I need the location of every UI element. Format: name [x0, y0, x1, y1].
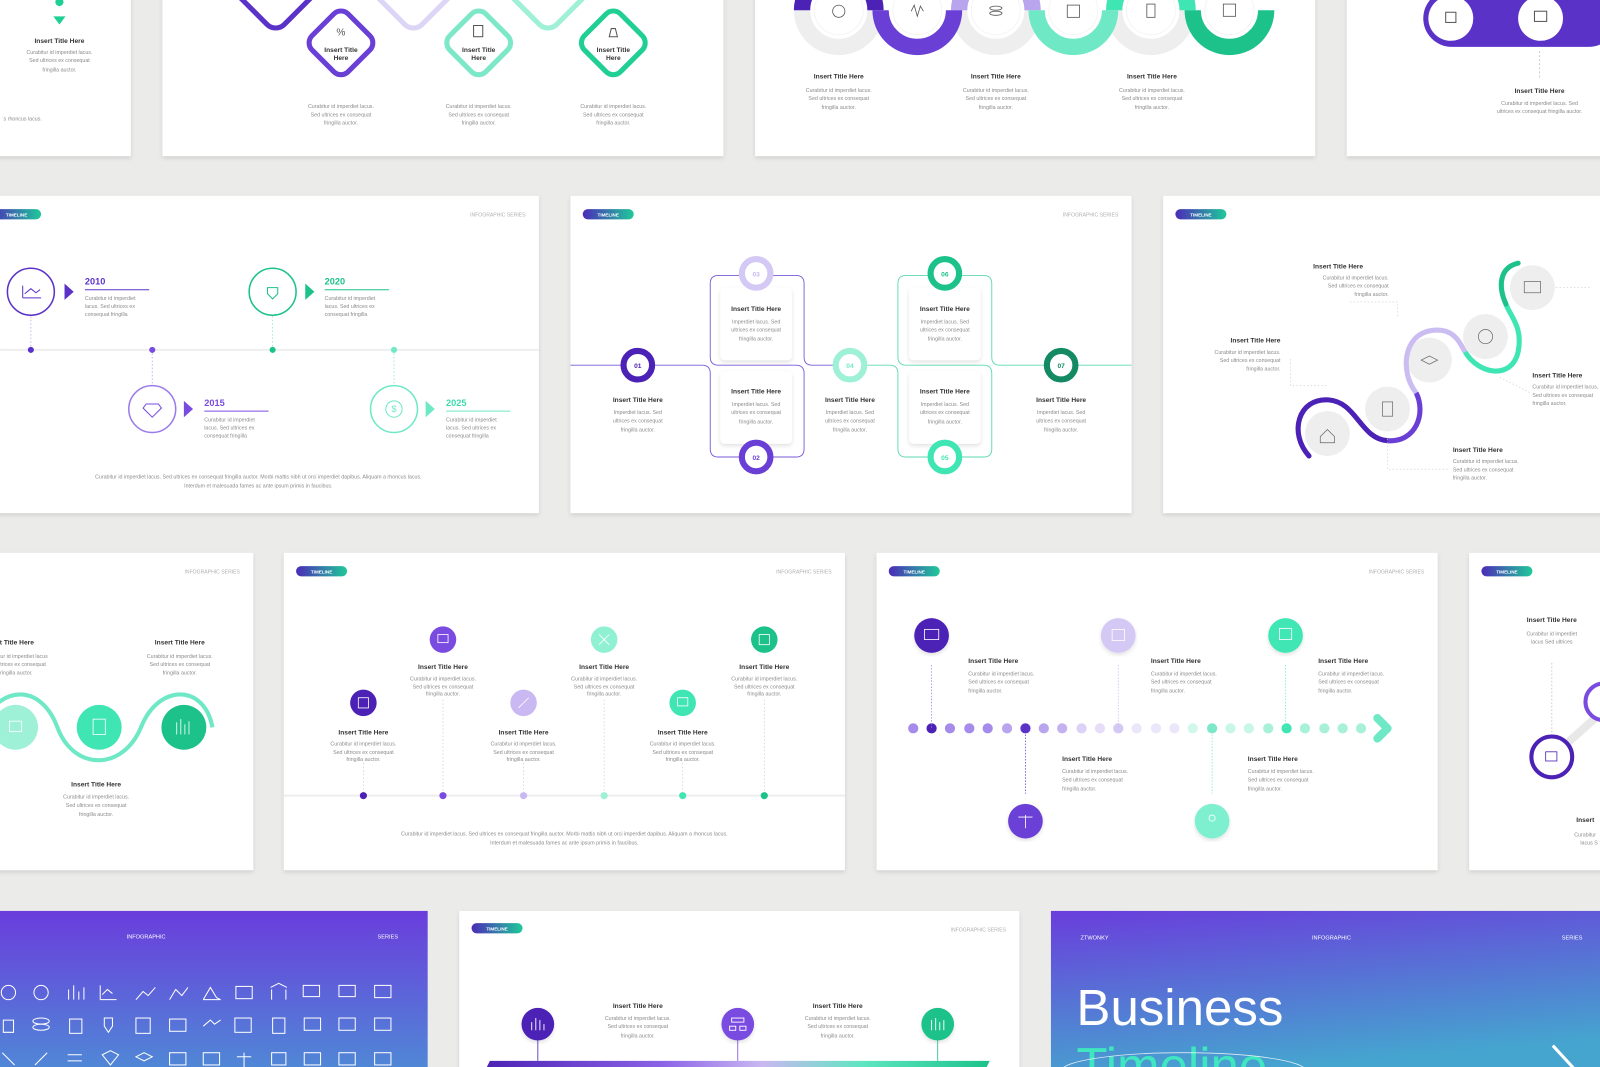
- slide: s-curve: fringilla auctor.: [1246, 366, 1280, 372]
- slide: icon set gradient: SERIES: [378, 934, 398, 940]
- slide: numbered process: fringilla auctor.: [833, 427, 867, 433]
- slide: wave circles: Curabitur id imperdiet lacus.: [63, 795, 129, 801]
- slide: dotted arrow timeline: Insert Title Here: [1062, 756, 1112, 763]
- slide: stepped icons timeline: [284, 553, 845, 870]
- slide: top-left partial: Curabitur id imperdiet lacus.: [26, 50, 92, 56]
- slide: numbered process: fringilla auctor.: [621, 427, 655, 433]
- slide: s-curve: Insert Title Here: [1313, 263, 1363, 270]
- slide: top-right partial: [1347, 0, 1600, 156]
- slide: icon set gradient: [0, 911, 428, 1067]
- slide: dotted arrow timeline: Insert Title Here: [968, 658, 1019, 665]
- slide: dotted arrow timeline: TIMELINE: [904, 569, 925, 574]
- slide: right partial vertical: Insert Title Here: [1527, 617, 1577, 624]
- slide: numbered process: 02: [752, 455, 760, 462]
- slide: cover Business Timeline: INFOGRAPHIC: [1312, 935, 1351, 941]
- slide: diamonds: Here: [334, 55, 349, 62]
- slide: right partial vertical: [1469, 553, 1600, 870]
- slide: diamonds: Curabitur id imperdiet lacus.: [446, 104, 512, 110]
- slide: dotted arrow timeline: Sed ultrices ex consequat: [968, 679, 1029, 685]
- slide: ring chain: Curabitur id imperdiet lacus.: [1119, 88, 1185, 94]
- slide: years timeline: Curabitur id imperdiet: [446, 417, 497, 423]
- slide: numbered process: Insert Title Here: [920, 306, 970, 313]
- slide: ring chain: fringilla auctor.: [979, 105, 1013, 111]
- slide: years timeline: 2010: [85, 277, 105, 287]
- slide: diamonds: Sed ultrices ex consequat: [583, 112, 644, 118]
- slide: years timeline: lacus. Sed ultrices ex: [204, 425, 255, 431]
- slide: stepped icons timeline: Insert Title Here: [418, 664, 468, 671]
- slide: dotted arrow timeline: Curabitur id imperdiet lacus.: [1151, 671, 1217, 677]
- slide: numbered process: TIMELINE: [598, 212, 619, 217]
- slide: numbered process: Imperdiet lacus. Sed: [826, 410, 874, 416]
- slide: stepped icons timeline: Sed ultrices ex consequat: [413, 685, 474, 691]
- slide: stepped icons timeline: INFOGRAPHIC SERIES: [776, 569, 832, 575]
- slide: right partial vertical: lacus Sed ultrices: [1531, 640, 1573, 646]
- slide: top-left partial: Insert Title Here: [34, 38, 85, 45]
- slide: numbered process: 04: [846, 363, 854, 370]
- slide: numbered process: [570, 196, 1132, 513]
- slide: top-right partial: ultrices ex consequat fringilla auctor.: [1497, 109, 1582, 115]
- slide: years timeline: TIMELINE: [6, 212, 27, 217]
- slide: stepped icons timeline: Insert Title Here: [338, 729, 389, 736]
- slide: diamonds: [162, 0, 723, 156]
- slide: dotted arrow timeline: Sed ultrices ex consequat: [1318, 679, 1379, 685]
- slide: numbered process: Insert Title Here: [731, 306, 781, 313]
- slide: diamonds: Insert Title: [462, 47, 496, 54]
- slide: diamonds: %: [336, 28, 345, 39]
- slide: cover Business Timeline: [1051, 911, 1600, 1067]
- slide: right partial vertical: Curabitur id imperdiet: [1526, 632, 1578, 638]
- slide: stepped icons timeline: Curabitur id imperdiet lacus.: [731, 676, 797, 682]
- slide: chevron band timeline: Curabitur id imperdiet lacus.: [605, 1016, 671, 1022]
- slide: cover Business Timeline: ZTWONKY: [1081, 935, 1109, 941]
- slide: chevron band timeline: [459, 911, 1019, 1067]
- slide: numbered process: 07: [1057, 363, 1065, 370]
- slide: numbered process: Insert Title Here: [613, 397, 663, 404]
- slide: numbered process: ultrices ex consequat: [731, 410, 782, 416]
- slide: diamonds: fringilla auctor.: [462, 120, 496, 126]
- slide: numbered process: 06: [941, 271, 949, 278]
- slide: numbered process: fringilla auctor.: [739, 419, 773, 425]
- slide: right partial vertical: Insert: [1576, 817, 1595, 824]
- slide: numbered process: 03: [752, 271, 760, 278]
- slide: chevron band timeline: Sed ultrices ex consequat: [607, 1024, 669, 1030]
- slide: stepped icons timeline: Sed ultrices ex consequat: [574, 685, 635, 691]
- slide: stepped icons timeline: Sed ultrices ex consequat: [333, 750, 394, 756]
- slide: ring chain: Insert Title Here: [971, 74, 1021, 81]
- slide: wave circles: fringilla auctor.: [79, 812, 113, 818]
- slide: dotted arrow timeline: Insert Title Here: [1151, 658, 1201, 665]
- slide: ring chain: fringilla auctor.: [822, 105, 856, 111]
- slide: numbered process: Imperdiet lacus. Sed: [1037, 410, 1085, 416]
- slide: dotted arrow timeline: fringilla auctor.: [1151, 689, 1185, 695]
- slide: years timeline: INFOGRAPHIC SERIES: [470, 212, 526, 218]
- slide: ring chain: Curabitur id imperdiet lacus.: [963, 88, 1029, 94]
- slide: numbered process: Insert Title Here: [920, 389, 970, 396]
- slide: years timeline: Curabitur id imperdiet: [204, 417, 255, 423]
- slide: s-curve: fringilla auctor.: [1354, 292, 1389, 298]
- slide: dotted arrow timeline: fringilla auctor.: [1248, 787, 1282, 793]
- slide: years timeline: Curabitur id imperdiet lacus. Sed ultrices ex consequat fringilla auctor. Morbi mattis nibh ut orci imperdiet dapibus. Aliquam a rhoncus lacus.: [95, 474, 422, 480]
- slide: numbered process: ultrices ex consequat: [825, 418, 875, 424]
- slide: years timeline: 2020: [325, 277, 345, 287]
- slide: stepped icons timeline: Sed ultrices ex consequat: [734, 685, 795, 691]
- slide: wave circles: Insert Title Here: [155, 640, 205, 647]
- slide: numbered process: INFOGRAPHIC SERIES: [1063, 212, 1119, 218]
- slide: diamonds: Insert Title: [324, 47, 358, 54]
- slide: s-curve: Sed ultrices ex consequat: [1328, 284, 1389, 290]
- slide: s-curve: Curabitur id imperdiet lacus.: [1323, 276, 1389, 282]
- slide: top-right partial: Insert Title Here: [1515, 88, 1565, 95]
- slide: dotted arrow timeline: Sed ultrices ex consequat: [1151, 679, 1212, 685]
- slide: years timeline: 2025: [446, 398, 466, 408]
- slide: numbered process: ultrices ex consequat: [920, 328, 970, 334]
- slide: s-curve: Curabitur id imperdiet lacus.: [1453, 459, 1519, 465]
- slide: s-curve: Insert Title Here: [1532, 372, 1583, 379]
- slide: numbered process: 01: [634, 363, 642, 370]
- slide: dotted arrow timeline: Sed ultrices ex consequat: [1062, 777, 1123, 783]
- slide: chevron band timeline: fringilla auctor.: [621, 1033, 655, 1039]
- slide: stepped icons timeline: fringilla auctor.: [747, 692, 781, 698]
- slide: stepped icons timeline: Curabitur id imperdiet lacus.: [571, 676, 637, 682]
- slide: top-left partial: [0, 0, 131, 156]
- slide: years timeline: consequat fringilla: [325, 312, 367, 318]
- slide: stepped icons timeline: fringilla auctor.: [666, 757, 700, 763]
- slide: s-curve: Insert Title Here: [1453, 447, 1503, 454]
- slide: wave circles: Sed ultrices ex consequat: [66, 803, 127, 809]
- slide: stepped icons timeline: Insert Title Here: [658, 729, 708, 736]
- slide: stepped icons timeline: Curabitur id imperdiet lacus.: [650, 742, 716, 748]
- slide: years timeline: consequat fringilla: [204, 434, 247, 440]
- slide: s-curve: Sed ultrices ex consequat: [1220, 358, 1281, 364]
- slide: chevron band timeline: Curabitur id imperdiet lacus.: [805, 1016, 871, 1022]
- slide: numbered process: Imperdiet lacus. Sed: [921, 319, 969, 325]
- slide: years timeline: lacus. Sed ultrices ex: [325, 304, 375, 310]
- slide: chevron band timeline: fringilla auctor.: [821, 1033, 855, 1039]
- slide: wave circles: fringilla auctor.: [163, 670, 197, 676]
- slide: dotted arrow timeline: fringilla auctor.: [1318, 689, 1352, 695]
- slide: dotted arrow timeline: Sed ultrices ex consequat: [1248, 777, 1309, 783]
- slide: stepped icons timeline: TIMELINE: [311, 569, 332, 574]
- slide: numbered process: ultrices ex consequat: [920, 410, 970, 416]
- slide: wave circles: Insert Title Here: [71, 781, 121, 788]
- slide: dotted arrow timeline: [877, 553, 1438, 870]
- slide: wave circles: [0, 553, 253, 870]
- slide: chevron band timeline: INFOGRAPHIC SERIES: [951, 927, 1007, 933]
- slide: dotted arrow timeline: fringilla auctor.: [1062, 787, 1096, 793]
- slide: s-curve: fringilla auctor.: [1532, 401, 1567, 407]
- slide: numbered process: Imperdiet lacus. Sed: [732, 402, 780, 408]
- slide: stepped icons timeline: fringilla auctor.: [346, 757, 380, 763]
- slide: dotted arrow timeline: Curabitur id imperdiet lacus.: [968, 671, 1034, 677]
- slide: dotted arrow timeline: Curabitur id imperdiet lacus.: [1062, 769, 1128, 775]
- slide: stepped icons timeline: Insert Title Here: [499, 729, 549, 736]
- slide: wave circles: INFOGRAPHIC SERIES: [184, 569, 241, 575]
- slide: numbered process: Imperdiet lacus. Sed: [921, 402, 969, 408]
- slide: stepped icons timeline: fringilla auctor.: [587, 692, 621, 698]
- slide: dotted arrow timeline: INFOGRAPHIC SERIES: [1369, 569, 1425, 575]
- slide: ring chain: Insert Title Here: [814, 74, 864, 81]
- slide: diamonds: fringilla auctor.: [596, 120, 630, 126]
- slide: wave circles: Sed ultrices ex consequat: [149, 662, 211, 668]
- slide: diamonds: Here: [606, 55, 621, 62]
- slide: ring chain: Sed ultrices ex consequat: [1122, 96, 1183, 102]
- slide: stepped icons timeline: Sed ultrices ex consequat: [652, 750, 714, 756]
- slide: ring chain: [755, 0, 1315, 156]
- slide: right partial vertical: TIMELINE: [1496, 569, 1518, 574]
- slide: s-curve: Insert Title Here: [1231, 338, 1281, 345]
- slide: s-curve: Sed ultrices ex consequat: [1532, 393, 1594, 399]
- slide: dotted arrow timeline: Curabitur id imperdiet lacus.: [1318, 671, 1384, 677]
- slide: stepped icons timeline: Curabitur id imperdiet lacus.: [330, 742, 396, 748]
- slide: years timeline: [0, 196, 539, 513]
- slide: dotted arrow timeline: fringilla auctor.: [968, 689, 1002, 695]
- slide: diamonds: fringilla auctor.: [324, 120, 358, 126]
- slide: numbered process: Imperdiet lacus. Sed: [614, 410, 662, 416]
- slide: diamonds: Here: [471, 55, 486, 62]
- slide: cover Business Timeline: Business: [1076, 979, 1283, 1036]
- slide: ring chain: Curabitur id imperdiet lacus.: [806, 88, 872, 94]
- slide: years timeline: 2015: [204, 398, 225, 408]
- slide: cover Business Timeline: SERIES: [1562, 935, 1583, 941]
- slide: numbered process: fringilla auctor.: [739, 337, 773, 343]
- slide: numbered process: ultrices ex consequat: [613, 418, 663, 424]
- slide: diamonds: Insert Title: [597, 47, 630, 54]
- slide: right partial vertical: lacus S: [1580, 841, 1598, 847]
- slide: chevron band timeline: Sed ultrices ex consequat: [807, 1024, 869, 1030]
- slide: top-left partial: Sed ultrices ex consequat: [29, 58, 90, 64]
- slide: stepped icons timeline: Insert Title Here: [739, 664, 790, 671]
- slide: chevron band timeline: Insert Title Here: [613, 1003, 663, 1010]
- slide: stepped icons timeline: Curabitur id imperdiet lacus. Sed ultrices ex consequat fringilla auctor. Morbi mattis nibh ut orci imperdiet dapibus. Aliquam a rhoncus lacus.: [401, 831, 728, 837]
- slide: years timeline: Curabitur id imperdiet: [325, 296, 376, 302]
- slide: ring chain: fringilla auctor.: [1135, 105, 1169, 111]
- slide: s-curve: fringilla auctor.: [1453, 475, 1487, 481]
- slide: s-curve: Curabitur id imperdiet lacus.: [1215, 350, 1280, 356]
- slide: chevron band timeline: TIMELINE: [486, 926, 508, 931]
- slide: stepped icons timeline: Sed ultrices ex consequat: [493, 750, 554, 756]
- slide: s-curve: [1163, 196, 1600, 513]
- slide: numbered process: Insert Title Here: [731, 389, 781, 396]
- slide: stepped icons timeline: Interdum et malesuada fames ac ante ipsum primis in faucibus.: [490, 841, 639, 847]
- slide: stepped icons timeline: Curabitur id imperdiet lacus.: [410, 676, 476, 682]
- slide: diamonds: Sed ultrices ex consequat: [448, 112, 510, 118]
- slide: ring chain: Sed ultrices ex consequat: [808, 96, 870, 102]
- slide: years timeline: lacus. Sed ultrices ex: [446, 425, 496, 431]
- slide: stepped icons timeline: fringilla auctor.: [426, 692, 460, 698]
- slide: numbered process: ultrices ex consequat: [1036, 418, 1087, 424]
- slide: s-curve: TIMELINE: [1190, 212, 1212, 217]
- slide: dotted arrow timeline: Insert Title Here: [1248, 756, 1298, 763]
- slide: numbered process: ultrices ex consequat: [731, 328, 782, 334]
- slide: years timeline: consequat fringilla: [85, 312, 128, 318]
- slide: chevron band timeline: Insert Title Here: [813, 1003, 863, 1010]
- slide: years timeline: Interdum et malesuada fames ac ante ipsum primis in faucibus.: [184, 484, 333, 490]
- slide: years timeline: consequat fringilla: [446, 434, 489, 440]
- slide: right partial vertical: Curabitur: [1574, 832, 1596, 838]
- slide: numbered process: Insert Title Here: [825, 397, 875, 404]
- slide: years timeline: $: [391, 404, 397, 414]
- slide: numbered process: fringilla auctor.: [928, 419, 962, 425]
- slide: ring chain: Insert Title Here: [1127, 74, 1177, 81]
- slide: stepped icons timeline: Insert Title Here: [579, 664, 629, 671]
- slide: numbered process: Imperdiet lacus. Sed: [732, 319, 780, 325]
- slide: top-right partial: Curabitur id imperdiet lacus. Sed: [1501, 101, 1578, 107]
- slide: top-left partial: s rhoncus lacus.: [4, 116, 42, 122]
- slide: stepped icons timeline: fringilla auctor.: [506, 757, 541, 763]
- slide: ring chain: Sed ultrices ex consequat: [966, 96, 1027, 102]
- slide: top-left partial: fringilla auctor.: [42, 67, 77, 73]
- slide: wave circles: Curabitur id imperdiet lacus.: [147, 654, 213, 660]
- slide: stepped icons timeline: Curabitur id imperdiet lacus.: [491, 742, 557, 748]
- slide: numbered process: Insert Title Here: [1036, 397, 1086, 404]
- slide: diamonds: Sed ultrices ex consequat: [311, 112, 372, 118]
- slide: numbered process: 05: [941, 455, 949, 462]
- slide: icon set gradient: INFOGRAPHIC: [127, 934, 166, 940]
- slide: s-curve: Sed ultrices ex consequat: [1453, 467, 1514, 473]
- slide: dotted arrow timeline: Curabitur id imperdiet lacus.: [1248, 769, 1314, 775]
- slide: diamonds: Curabitur id imperdiet lacus.: [308, 104, 374, 110]
- slide: diamonds: Curabitur id imperdiet lacus.: [580, 104, 646, 110]
- slide: numbered process: fringilla auctor.: [1044, 427, 1078, 433]
- slide: years timeline: lacus. Sed ultrices ex: [85, 304, 135, 310]
- slide: dotted arrow timeline: Insert Title Here: [1318, 658, 1368, 665]
- slide: years timeline: Curabitur id imperdiet: [85, 296, 136, 302]
- slide: s-curve: Curabitur id imperdiet lacus.: [1532, 385, 1598, 391]
- slide: numbered process: fringilla auctor.: [928, 337, 962, 343]
